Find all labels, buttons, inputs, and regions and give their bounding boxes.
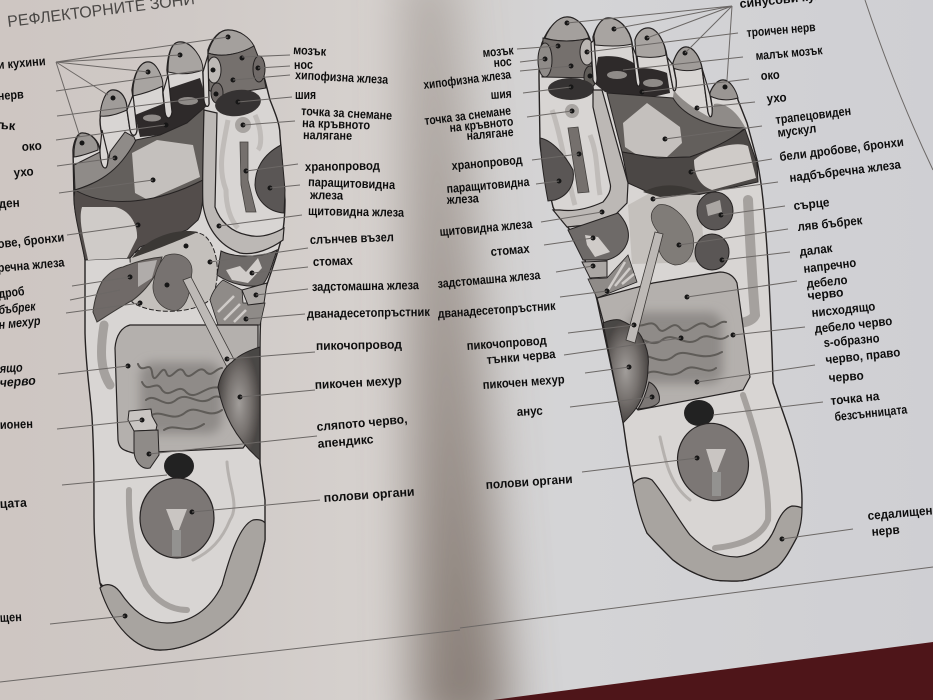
left foot labels, right side: слънчев възел xyxy=(310,230,394,247)
toe base zone xyxy=(74,132,136,190)
small intestine coils xyxy=(138,364,226,430)
toe notches xyxy=(591,40,712,117)
right foot labels, right side: нисходящо xyxy=(811,299,876,320)
left foot labels, right side: хранопровод xyxy=(305,159,380,174)
vertical streak xyxy=(725,200,755,324)
right foot labels, left side: хранопровод xyxy=(451,153,523,173)
right foot labels, right side: малък мозък xyxy=(755,43,824,63)
big toe cap xyxy=(208,30,254,55)
left foot labels, right side: хипофизна жлеза xyxy=(295,68,389,87)
nose zones xyxy=(538,43,552,77)
stomach zone xyxy=(217,250,277,286)
dark curve xyxy=(643,185,700,197)
heel vein left xyxy=(660,437,690,500)
right foot labels, right side: черво, право xyxy=(825,345,901,367)
duodenum xyxy=(588,255,637,298)
right foot labels, left side: щитовидна жлеза xyxy=(439,217,534,239)
left kidney xyxy=(651,205,694,265)
stomach zone xyxy=(568,213,628,260)
right foot labels, right side: нерв xyxy=(871,523,900,539)
right foot labels, left side: шия xyxy=(490,87,512,102)
right foot labels, right side: сърце xyxy=(793,195,830,213)
intestine shade xyxy=(140,362,222,434)
left foot labels, left side: цата xyxy=(0,496,28,511)
right foot labels, right side: дебело xyxy=(806,273,848,291)
bone streaks xyxy=(222,115,261,228)
lung band xyxy=(74,180,203,260)
right foot labels, left side: пикочен мехур xyxy=(482,372,565,392)
left foot labels, left side: черво xyxy=(0,373,36,390)
left foot labels, left side: щен xyxy=(0,610,22,625)
bladder xyxy=(603,320,648,423)
right foot labels, left side: жлеза xyxy=(446,191,480,207)
eye band xyxy=(594,56,670,100)
sciatic nerve crescent xyxy=(633,478,802,581)
pancreas xyxy=(242,283,267,305)
left foot labels, right side: мозък xyxy=(293,43,327,59)
duodenum xyxy=(210,280,265,325)
neck zone xyxy=(548,78,594,100)
heel veins xyxy=(715,395,768,548)
stomach highlight xyxy=(585,235,610,257)
left foot labels, right side: полови органи xyxy=(323,485,415,505)
right foot labels, left side: паращитовидна xyxy=(446,175,531,196)
torso muscle highlight xyxy=(623,103,682,157)
right foot labels, right side: надбъбречна жлеза xyxy=(789,157,902,185)
uterus xyxy=(166,509,187,530)
right foot labels, right side: трапецовиден xyxy=(775,104,852,127)
thyroid U zone xyxy=(553,90,628,227)
trapezius zone xyxy=(607,93,745,158)
caecum xyxy=(134,430,159,468)
small intestine coils xyxy=(630,322,728,375)
right foot labels, right side: s-образно xyxy=(823,331,880,350)
eyes xyxy=(143,114,161,122)
right foot labels, left side: мозък xyxy=(482,43,515,60)
right foot outline xyxy=(539,17,802,581)
right foot labels, right side: око xyxy=(760,68,780,83)
cervix xyxy=(712,472,721,496)
cervix xyxy=(172,530,181,556)
esophagus xyxy=(240,142,256,212)
right page leader lines xyxy=(517,6,853,539)
left foot labels, right side: налягане xyxy=(303,128,352,143)
heart xyxy=(697,192,733,230)
genital organs circle xyxy=(668,414,758,510)
parathyroid gland xyxy=(255,145,285,213)
right foot labels, left side: нос xyxy=(493,54,512,70)
lung band xyxy=(622,129,758,195)
left foot labels, left side: ухо xyxy=(13,164,35,180)
liver xyxy=(93,257,162,322)
appendix xyxy=(128,409,157,431)
left foot labels, right side: пикочопровод xyxy=(316,337,402,353)
solar plexus area xyxy=(628,193,705,264)
right foot labels, left side: стомах xyxy=(490,242,530,259)
other toes xyxy=(168,42,203,74)
right foot labels, right side: ляв бъбрек xyxy=(797,213,864,234)
left foot outline xyxy=(73,30,285,650)
left foot labels, right side: паращитовидна xyxy=(308,175,396,192)
right foot labels, right side xyxy=(739,0,933,539)
right foot labels, left side: задстомашна жлеза xyxy=(437,268,542,291)
insomnia point xyxy=(684,400,714,426)
right foot labels, left side: хипофизна жлеза xyxy=(423,67,513,92)
sciatic nerve crescent xyxy=(100,520,265,650)
right foot labels, right side: далак xyxy=(799,241,834,259)
brain zone xyxy=(542,38,593,78)
eyes xyxy=(607,71,627,79)
parathyroid gland xyxy=(540,138,573,201)
left foot diagram xyxy=(73,30,285,650)
right foot labels, right side: напречно xyxy=(803,256,857,276)
right foot labels, right side: точка на xyxy=(830,389,881,408)
right foot labels, left side: налягане xyxy=(466,125,514,143)
bladder xyxy=(218,347,260,460)
right foot diagram xyxy=(538,17,802,581)
left foot labels, right side: пикочен мехур xyxy=(314,373,402,392)
right foot labels, left side: полови органи xyxy=(485,472,573,492)
white lung xyxy=(81,207,137,260)
uterus xyxy=(706,449,726,472)
right foot labels, right side: дебело черво xyxy=(814,314,893,336)
left foot labels, right side: апендикс xyxy=(317,432,374,451)
insomnia point xyxy=(164,453,194,479)
vertical streak xyxy=(102,325,110,385)
liver highlight xyxy=(138,260,157,287)
pressure point xyxy=(565,104,579,118)
stomach highlight xyxy=(226,258,262,283)
intestines frame xyxy=(597,272,750,410)
nose and pituitary zones xyxy=(207,57,221,83)
right foot labels, right side: мускул xyxy=(777,121,817,140)
right foot labels, left side: пикочопровод xyxy=(466,333,547,353)
esophagus xyxy=(568,127,589,193)
left foot labels, right side xyxy=(293,43,431,505)
right kidney xyxy=(153,254,192,310)
white lung xyxy=(694,144,756,190)
left foot labels, left side: ящо xyxy=(0,360,23,376)
ureter xyxy=(183,277,240,377)
left foot labels, right side: точка за снемане xyxy=(301,104,392,123)
heel vein right xyxy=(193,462,234,560)
other toes xyxy=(594,18,632,46)
toe notches xyxy=(100,55,209,168)
left page leader lines xyxy=(50,37,320,624)
left foot labels, right side: жлеза xyxy=(309,188,344,203)
heel veins xyxy=(129,490,187,610)
right foot labels, left side: на кръвното xyxy=(449,114,514,135)
left foot reflex points xyxy=(80,34,272,618)
left foot labels, left side xyxy=(0,54,66,625)
left foot labels, right side: задстомашна жлеза xyxy=(312,278,420,294)
right foot reflex points xyxy=(542,20,784,542)
eye band xyxy=(135,78,208,137)
right foot labels, left side: дванадесетопръстник xyxy=(437,299,557,321)
big toe cap xyxy=(545,17,589,41)
neck zone xyxy=(213,87,263,119)
thyroid U zone xyxy=(203,110,284,254)
column streaks xyxy=(552,110,600,205)
torso muscle highlight xyxy=(132,140,200,200)
toe base zone xyxy=(673,90,745,128)
spleen xyxy=(695,234,729,270)
intestines frame xyxy=(115,325,258,453)
ureter xyxy=(626,232,663,343)
duodenum stripes xyxy=(218,296,246,322)
pressure point xyxy=(235,117,251,133)
left foot labels, left side: око xyxy=(21,139,42,154)
right foot labels, right side: черво xyxy=(807,285,844,303)
genital organs circle xyxy=(140,478,214,558)
right foot labels, right side: безсънницата xyxy=(834,402,909,424)
left foot labels, right side: щитовидна жлеза xyxy=(308,204,405,220)
trapezius zone xyxy=(75,108,204,205)
left foot labels, right side: дванадесетопръстник xyxy=(307,305,431,321)
left foot labels, right side: шия xyxy=(295,88,316,102)
heart highlight xyxy=(706,200,722,216)
left foot labels, right side: на кръвното xyxy=(302,116,371,132)
right foot labels, right side: троичен нерв xyxy=(746,20,816,40)
right foot labels, left side xyxy=(423,43,573,492)
intestine shade xyxy=(628,312,723,384)
left foot labels, right side: нос xyxy=(294,58,313,72)
right foot labels, left side: анус xyxy=(516,404,543,419)
spine shadow xyxy=(405,0,510,700)
pancreas xyxy=(582,261,607,278)
red table edge xyxy=(493,642,933,700)
solar plexus area xyxy=(130,232,217,311)
brain zone xyxy=(208,46,266,96)
dark upper curve xyxy=(132,231,198,258)
right foot labels, right side: черво xyxy=(828,369,864,385)
right foot labels, right side: ухо xyxy=(766,90,788,106)
duodenum stripes xyxy=(608,262,634,290)
right foot labels, left side: точка за снемане xyxy=(424,103,512,128)
left foot labels, right side: сляпото черво, xyxy=(316,412,408,434)
anus zone xyxy=(638,382,659,409)
right foot labels, right side: бели дробове, бронхи xyxy=(779,135,904,164)
left foot labels, left side: ионен xyxy=(0,417,33,432)
right foot labels, left side: тънки черва xyxy=(486,347,557,367)
left foot labels, right side: стомах xyxy=(313,254,353,269)
